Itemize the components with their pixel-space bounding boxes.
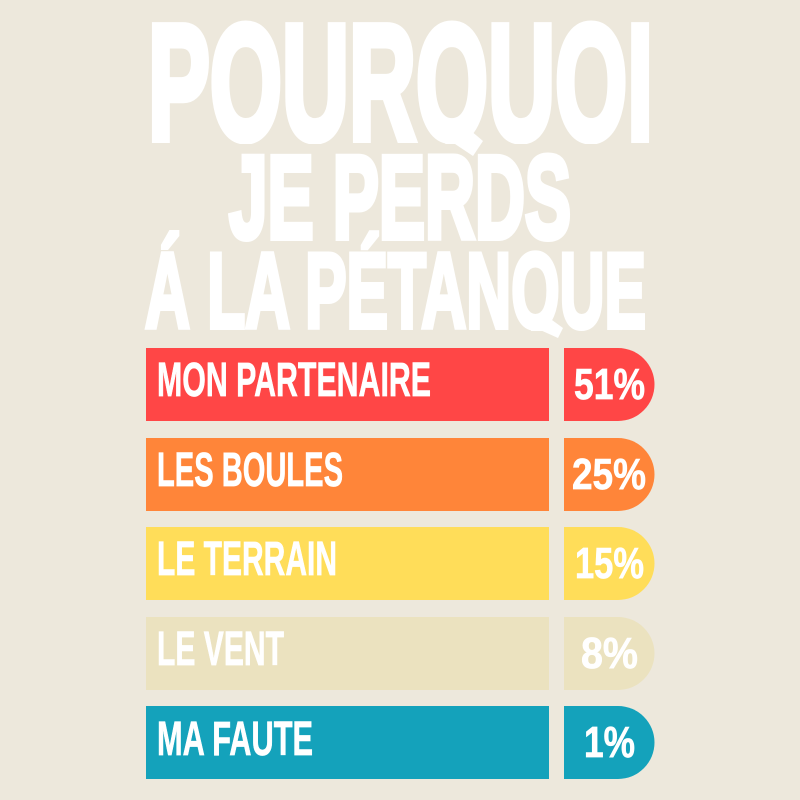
percentage tab bbox=[564, 706, 654, 779]
row: les boules 25% bbox=[146, 438, 654, 511]
percentage: 1% bbox=[584, 718, 635, 767]
title line 1 bbox=[152, 20, 649, 156]
percentage tab bbox=[564, 617, 654, 690]
title line 3 bbox=[144, 230, 645, 338]
bar label: MA FAUTE bbox=[157, 713, 313, 766]
infographic canvas bbox=[144, 20, 654, 779]
title line 2: JE PERDS bbox=[229, 132, 571, 264]
title bbox=[144, 20, 649, 338]
percentage: 25% bbox=[572, 450, 646, 499]
row: le terrain 15% bbox=[146, 527, 654, 600]
row: mon partenaire 51% bbox=[146, 348, 654, 421]
percentage: 51% bbox=[574, 360, 645, 409]
bar label: LE TERRAIN bbox=[157, 533, 337, 586]
bar label: MON PARTENAIRE bbox=[157, 354, 431, 407]
percentage: 8% bbox=[581, 629, 638, 678]
percentage tab bbox=[564, 348, 654, 421]
bar label: LE VENT bbox=[157, 623, 284, 676]
row: le vent 8% bbox=[146, 617, 654, 690]
bar bbox=[146, 438, 549, 511]
percentage tab bbox=[564, 527, 654, 600]
row: ma faute 1% bbox=[146, 706, 654, 779]
percentage: 15% bbox=[575, 539, 644, 588]
bar bbox=[146, 617, 549, 690]
bar bbox=[146, 348, 549, 421]
bar bbox=[146, 706, 549, 779]
bar bbox=[146, 527, 549, 600]
bar label: LES BOULES bbox=[157, 444, 343, 497]
percentage tab bbox=[564, 438, 654, 511]
